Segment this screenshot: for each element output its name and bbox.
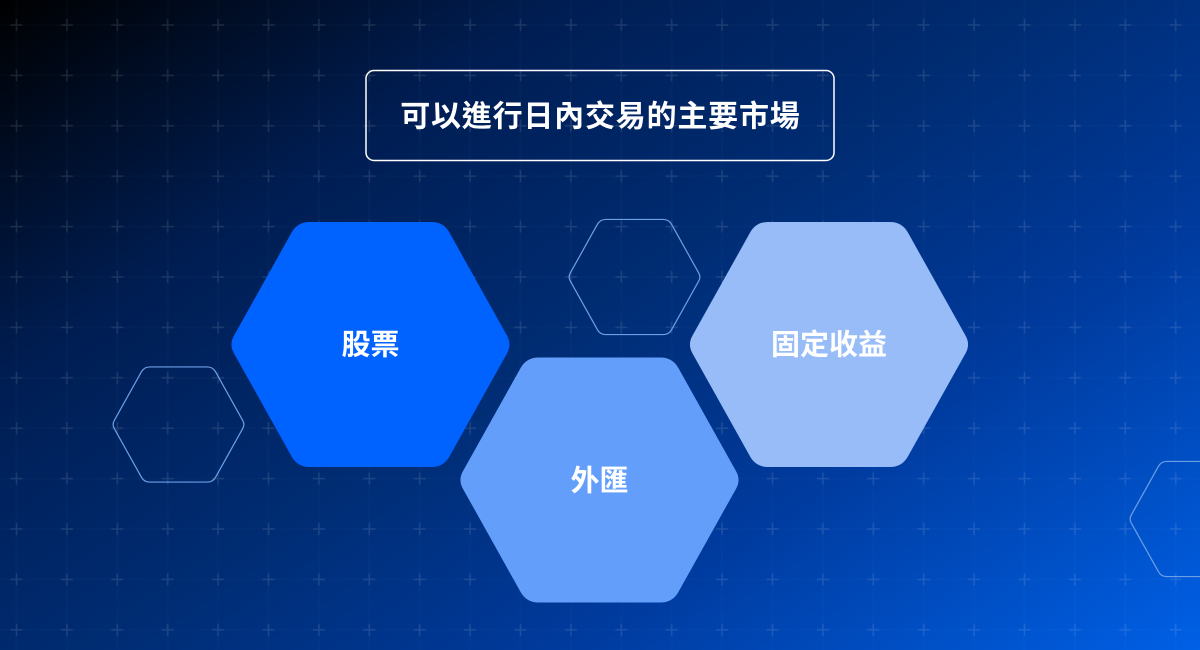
hexagon: forex xyxy=(460,358,739,602)
hexagon: stocks xyxy=(231,222,510,467)
hexagon: fixed income xyxy=(690,222,968,467)
label: stocks: 股票 xyxy=(341,330,400,362)
title box xyxy=(366,70,834,160)
outline hexagon: upper middle xyxy=(569,219,700,335)
title text: 可以進行日內交易的主要市場 xyxy=(400,100,801,134)
label: forex: 外匯 xyxy=(570,464,629,498)
label: fixed income: 固定收益 xyxy=(771,328,887,362)
outline hexagon: left xyxy=(113,367,244,482)
outline hexagon: right edge xyxy=(1130,461,1200,577)
